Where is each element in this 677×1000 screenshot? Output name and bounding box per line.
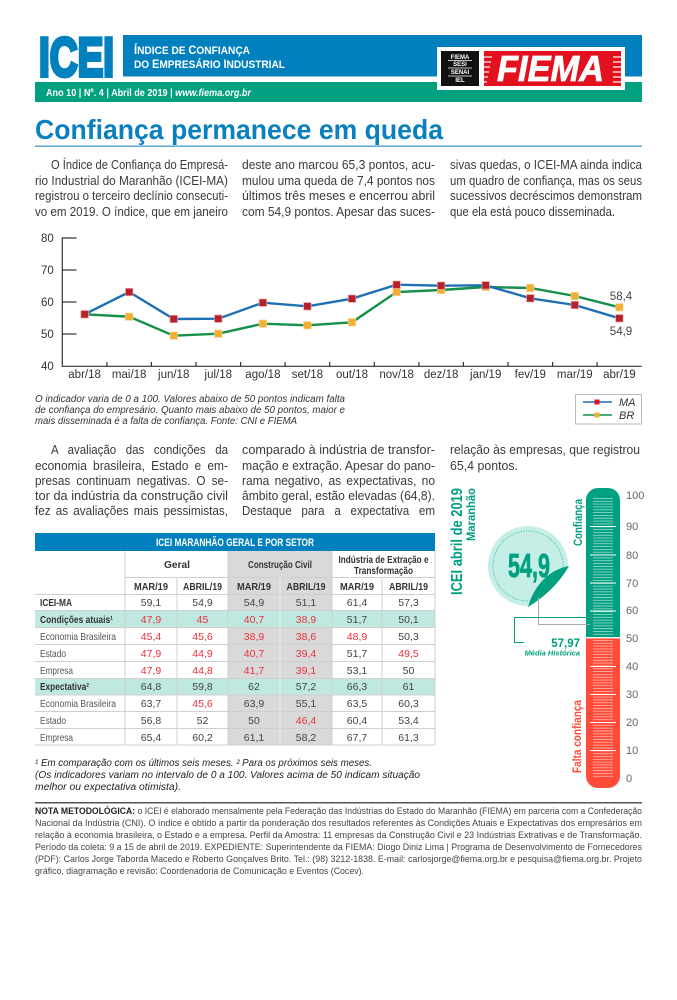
y axis: 70 <box>41 265 54 277</box>
intro text, column 1 <box>35 157 228 219</box>
body text, column 3: 65,4 pontos. <box>450 459 518 473</box>
body text, column 2: rama negativo, as expectativas, no <box>242 474 435 488</box>
table values: 57,3 <box>398 597 419 609</box>
row labels <box>40 597 116 744</box>
body text, column 2: mação e extração. Apesar do pano- <box>242 459 435 473</box>
table values: 50,3 <box>398 631 419 643</box>
chart note: mais disseminada é a falta de confiança. Fonte: CNI e FIEMA <box>35 416 297 427</box>
table values: 38,6 <box>296 631 316 643</box>
x axis labels: out/18 <box>336 369 368 381</box>
value badge 54,9 <box>488 526 569 607</box>
column headers: ABRIL/19 <box>286 581 326 593</box>
table values: 51,1 <box>296 597 316 609</box>
column headers: MAR/19 <box>340 581 374 593</box>
table values: 61,3 <box>398 732 419 744</box>
header banner <box>35 26 642 102</box>
scale numbers: 20 <box>626 717 638 729</box>
column headers: Geral <box>164 559 190 571</box>
body text, column 2: Destaque para a expectativa em <box>242 504 435 518</box>
table values: 45 <box>197 614 208 626</box>
methodology note: (PDF): Carlos Jorge Taborda Macedo e Roberto Gonçalves Brito. Tel.: (98) 3212-1838. E-mail: carlosjorge@fiema.org.br e pesquisa@fiema.org.br. Projeto <box>35 854 642 865</box>
table values: 44,9 <box>192 648 213 660</box>
methodology note: Nacional da Indústria (CNI). O índice é obtido a partir da ponderação dos resultados referentes às Condições Atuais e Expectativas dos empresários em <box>35 818 642 829</box>
body text, column 3 <box>450 443 640 473</box>
column headers: MAR/19 <box>134 581 168 593</box>
body text, column 2: âmbito geral, estão elevadas (64,8). <box>242 489 435 503</box>
table values: 54,9 <box>244 597 264 609</box>
chart note <box>35 394 345 427</box>
x axis labels: mai/18 <box>112 369 146 381</box>
body text, column 1: A avaliação das condições da <box>51 443 228 457</box>
FIEMA logo: IEL <box>455 78 465 84</box>
scale numbers: 90 <box>626 521 638 533</box>
scale numbers: 50 <box>626 633 638 645</box>
intro text, column 3: sivas quedas, o ICEI-MA ainda indica <box>450 158 642 172</box>
FIEMA logo: FIEMA <box>497 48 604 89</box>
column headers: Transformação <box>354 565 413 577</box>
table values: 54,9 <box>192 597 213 609</box>
table values: 62 <box>248 681 260 693</box>
column headers: MAR/19 <box>237 581 271 593</box>
table values <box>141 597 419 744</box>
x axis labels: jul/18 <box>204 369 232 381</box>
table values: 61 <box>403 681 414 693</box>
table values: 47,9 <box>141 665 161 677</box>
intro text, column 2: últimos três meses e encerrou abril <box>242 189 435 203</box>
methodology note: relação à economia brasileira, o Estado e a empresa. Perfil da Amostra: 11 empresas da Construção Civil e 23 Indústrias Extrativas e de Transformação. <box>35 830 642 841</box>
table values: 60,4 <box>347 715 367 727</box>
intro text, column 2 <box>242 158 435 219</box>
historical average: Média Histórica <box>525 648 580 658</box>
table values: 63,7 <box>141 698 161 710</box>
intro text, column 1: O Índice de Confiança do Empresá- <box>51 157 228 172</box>
column headers: Indústria de Extração e <box>338 554 429 566</box>
table footnotes: ¹ Em comparação com os últimos seis meses. ² Para os próximos seis meses. <box>35 758 372 769</box>
chart legend <box>576 394 642 424</box>
intro text, column 2: com 54,9 pontos. Apesar das suces- <box>242 205 435 219</box>
body text, column 1: fez as avaliações mais pessimistas, <box>35 504 228 518</box>
table values: 39,1 <box>296 665 316 677</box>
column headers <box>134 554 429 593</box>
x axis labels <box>68 369 636 381</box>
body text, column 1 <box>35 443 228 518</box>
table values: 67,7 <box>347 732 367 744</box>
gauge heading: ICEI abril de 2019 <box>449 488 466 595</box>
x axis labels: abr/19 <box>603 369 636 381</box>
y axis: 60 <box>41 297 54 309</box>
publication name <box>134 42 285 71</box>
table values: 38,9 <box>296 614 316 626</box>
table values: 63,5 <box>347 698 367 710</box>
end value labels: 54,9 <box>610 326 632 338</box>
x axis labels: mar/19 <box>557 369 593 381</box>
scale numbers: 0 <box>626 773 632 785</box>
body text, column 2: comparado à indústria de transfor- <box>242 443 435 457</box>
historical average: 57,97 <box>551 638 580 650</box>
FIEMA logo: SENAI <box>451 70 469 76</box>
table values: 50 <box>403 665 414 677</box>
body text, column 1: presas continuam negativas. O se- <box>35 474 228 488</box>
table footnotes: (Os indicadores variam no intervalo de 0 a 100. Valores acima de 50 indicam situação <box>35 770 420 781</box>
table values: 50 <box>248 715 260 727</box>
chart note: O indicador varia de 0 a 100. Valores abaixo de 50 pontos indicam falta <box>35 394 345 405</box>
table title bar: ICEI MARANHÃO GERAL E POR SETOR <box>156 536 314 549</box>
table values: 40,7 <box>244 614 264 626</box>
row labels: Condições atuais¹ <box>40 614 113 626</box>
intro text, column 1: rio Industrial do Maranhão (ICEI-MA) <box>35 174 228 188</box>
column headers: Construção Civil <box>248 559 312 571</box>
line chart: MA vs BR <box>41 233 642 381</box>
intro text, column 2: deste ano marcou 65,3 pontos, acu- <box>242 158 435 172</box>
column headers: ABRIL/19 <box>183 581 222 593</box>
table values: 52 <box>197 715 208 727</box>
x axis labels: ago/18 <box>245 369 280 381</box>
table values: 61,1 <box>244 732 264 744</box>
row labels: Estado <box>40 648 66 660</box>
table values: 61,4 <box>347 597 367 609</box>
publication name: ÍNDICE DE CONFIANÇA <box>134 42 250 57</box>
row labels: Economia Brasileira <box>40 631 116 643</box>
bar labels <box>572 498 585 773</box>
table values: 59,1 <box>141 597 161 609</box>
bar labels: Confiança <box>573 498 585 546</box>
connector lines <box>514 597 590 642</box>
table values: 51,7 <box>347 648 367 660</box>
intro text, column 3 <box>450 158 642 219</box>
table values: 47,9 <box>141 648 161 660</box>
table values: 48,9 <box>347 631 367 643</box>
y axis: 80 <box>41 233 54 245</box>
publication name: DO EMPRESÁRIO INDUSTRIAL <box>134 57 285 71</box>
methodology note: gráfico, diagramação e revisão: Coordenadoria de Comunicação e Eventos (Cocev). <box>35 866 364 877</box>
table values: 59,8 <box>192 681 213 693</box>
table: ICEI Maranhão geral e por setor <box>35 533 435 745</box>
row labels: Economia Brasileira <box>40 698 116 710</box>
end value labels: 58,4 <box>610 291 633 303</box>
methodology note <box>35 802 642 877</box>
methodology note: NOTA METODOLÓGICA: o ICEI é elaborado mensalmente pela Federação das Indústrias do Estado do Maranhão (FIEMA) em parceria com a Confederação <box>35 805 642 817</box>
x axis labels: abr/18 <box>68 369 101 381</box>
table values: 45,6 <box>192 698 213 710</box>
table values: 57,2 <box>296 681 316 693</box>
x axis labels: dez/18 <box>424 369 458 381</box>
table title bar <box>35 533 435 551</box>
row labels: Empresa <box>40 665 73 677</box>
gauge infographic: ICEI abril de 2019 <box>449 488 644 788</box>
chart legend: BR <box>619 410 634 422</box>
table values: 51,7 <box>347 614 367 626</box>
intro text, column 1: vo em 2019. O índice, que em janeiro <box>35 205 228 219</box>
y axis <box>41 233 642 373</box>
table footnotes <box>35 758 420 793</box>
table values: 50,1 <box>398 614 419 626</box>
intro text, column 3: que ela está pouco disseminada. <box>450 205 615 219</box>
table values: 49,5 <box>398 648 419 660</box>
end value labels <box>610 291 633 338</box>
scale numbers: 10 <box>626 745 638 757</box>
gauge heading: Maranhão <box>464 488 478 541</box>
table values: 64,8 <box>141 681 161 693</box>
body text, column 1: tor da indústria da construção civil <box>35 489 228 503</box>
BR series <box>81 283 623 339</box>
table values: 60,2 <box>192 732 213 744</box>
table values: 45,6 <box>192 631 213 643</box>
x axis labels: jun/18 <box>157 369 189 381</box>
scale numbers: 70 <box>626 578 638 590</box>
intro text, column 3: sucessivos decréscimos demonstram <box>450 189 642 203</box>
chart note: de confiança do empresário. Quanto mais abaixo de 50 pontos, maior e <box>35 405 345 416</box>
body text, column 2 <box>242 443 435 518</box>
table values: 39,4 <box>296 648 316 660</box>
ICEI logotype: ICEI <box>39 26 114 88</box>
row labels: Empresa <box>40 732 73 744</box>
column headers: ABRIL/19 <box>389 581 428 593</box>
FIEMA logo: SESI <box>453 62 467 68</box>
thermometer bar <box>586 488 620 788</box>
intro text, column 2: mulou uma queda de 7,4 pontos nos <box>242 174 435 188</box>
row labels: Expectativa² <box>40 681 89 693</box>
historical average <box>525 638 580 658</box>
table values: 40,7 <box>244 648 264 660</box>
value badge 54,9: 54,9 <box>508 547 550 584</box>
table values: 44,8 <box>192 665 213 677</box>
issue line: Ano 10 | Nº. 4 | Abril de 2019 | www.fiema.org.br <box>46 88 252 99</box>
scale numbers: 30 <box>626 689 638 701</box>
MA series <box>81 281 623 323</box>
row labels: ICEI-MA <box>40 597 72 609</box>
methodology note: Período da coleta: 9 a 15 de abril de 2019. EXPEDIENTE: Superintendente da FIEMA: Diogo Diniz Lima | Programa de Desenvolvimento de Fornecedores <box>35 842 642 853</box>
scale numbers: 100 <box>626 490 644 502</box>
scale numbers: 60 <box>626 605 638 617</box>
table values: 63,9 <box>244 698 264 710</box>
FIEMA logo: FIEMA <box>451 55 470 61</box>
scale numbers <box>626 490 644 785</box>
body text, column 3: relação às empresas, que registrou <box>450 443 640 457</box>
table values: 66,3 <box>347 681 367 693</box>
table values: 47,9 <box>141 614 161 626</box>
x axis labels: set/18 <box>292 369 323 381</box>
table values: 58,2 <box>296 732 316 744</box>
table values: 53,1 <box>347 665 367 677</box>
x axis labels: jan/19 <box>469 369 501 381</box>
table values: 55,1 <box>296 698 316 710</box>
table values: 53,4 <box>398 715 419 727</box>
body text, column 1: economia brasileira, Estado e em- <box>35 459 228 473</box>
intro text, column 3: um quadro de confiança, mas os seus <box>450 174 642 188</box>
scale numbers: 80 <box>626 550 638 562</box>
table footnotes: melhor ou expectativa otimista). <box>35 782 181 793</box>
row labels: Estado <box>40 715 66 727</box>
title: Confiança permanece em queda <box>35 114 443 145</box>
intro text, column 1: registrou o terceiro declínio consecuti- <box>35 189 228 203</box>
table values: 38,9 <box>244 631 264 643</box>
FIEMA logo <box>437 47 625 90</box>
table values: 41,7 <box>244 665 264 677</box>
table values: 65,4 <box>141 732 161 744</box>
x axis labels: nov/18 <box>379 369 414 381</box>
table values: 60,3 <box>398 698 419 710</box>
table values: 56,8 <box>141 715 161 727</box>
scale numbers: 40 <box>626 661 638 673</box>
table values: 45,4 <box>141 631 161 643</box>
table values: 46,4 <box>296 715 316 727</box>
chart legend: MA <box>619 397 636 409</box>
gauge heading <box>449 488 478 595</box>
x axis labels: fev/19 <box>515 369 546 381</box>
bar labels: Falta confiança <box>572 699 584 773</box>
y axis: 50 <box>41 329 54 341</box>
y axis: 40 <box>41 361 54 373</box>
